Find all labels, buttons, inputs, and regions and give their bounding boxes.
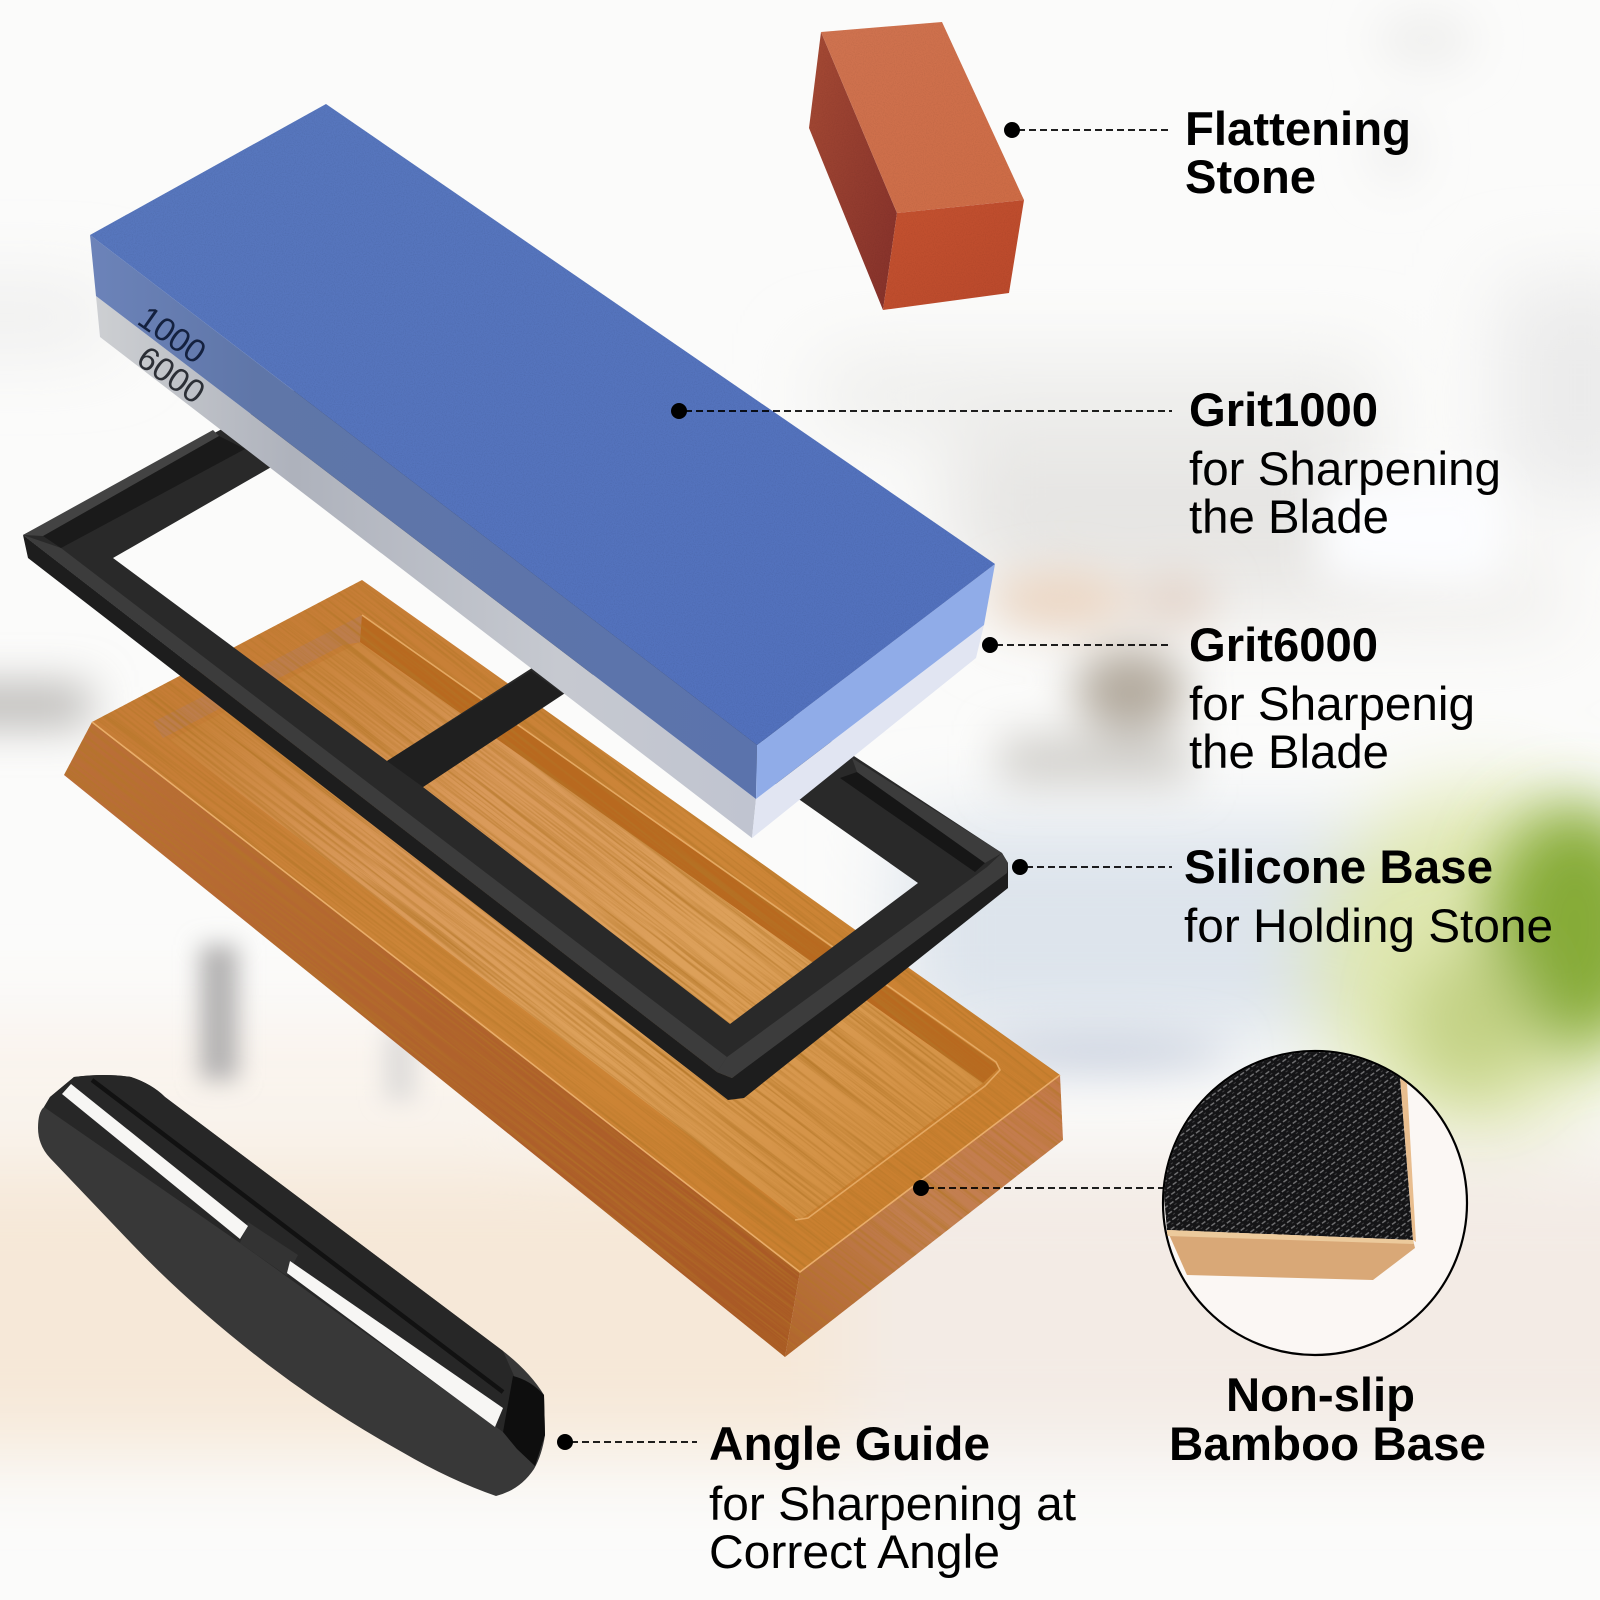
label: angle guide: for Sharpening at <box>709 1477 1076 1530</box>
circle background <box>1163 1051 1467 1355</box>
label: silicone base <box>1184 840 1553 952</box>
label: angle guide <box>709 1417 1076 1578</box>
leader: grit 6000 <box>982 637 1172 653</box>
label: grit 6000 <box>1189 618 1475 778</box>
frame short arm outer strip <box>23 430 219 536</box>
grit 1000 long side <box>90 235 757 799</box>
frame right arm groove <box>840 772 985 872</box>
label: grit 6000: for Sharpenig <box>1189 677 1475 730</box>
wood grain <box>64 581 1063 1357</box>
label: grit 1000 <box>1189 383 1501 543</box>
wood edge front <box>1167 1230 1415 1280</box>
bamboo top rim <box>92 580 1060 1272</box>
label: angle guide: Angle Guide <box>709 1417 990 1470</box>
flattening left face <box>809 32 897 310</box>
recess floor <box>170 642 983 1220</box>
wood edge top line <box>1167 1230 1414 1244</box>
label: non-slip bamboo base <box>1169 1368 1486 1470</box>
ceramic strip left <box>62 1084 248 1239</box>
silicone base frame <box>23 390 1008 1100</box>
frame crossbar <box>387 671 563 787</box>
guide channel <box>92 1080 503 1392</box>
grit 6000 end <box>752 625 984 838</box>
recess short wall <box>153 615 362 738</box>
grit labels on stone: 1000 <box>132 298 213 371</box>
label: grit 6000: the Blade <box>1189 725 1389 778</box>
flattening stone <box>800 20 1030 315</box>
frame short arm groove <box>43 436 245 548</box>
stone top face <box>90 104 995 745</box>
guide end cap <box>503 1376 545 1466</box>
label: grit 6000: Grit6000 <box>1189 618 1378 671</box>
label: angle guide: Correct Angle <box>709 1525 1000 1578</box>
guide upper ramp <box>44 1075 515 1432</box>
flattening texture <box>810 24 1022 307</box>
guide center bridge <box>240 1222 298 1276</box>
grit 6000 long side <box>96 296 756 838</box>
frame near arm band <box>717 853 1008 1078</box>
bamboo left side <box>64 722 800 1357</box>
angle guide <box>38 1075 545 1496</box>
label: grit 1000: the Blade <box>1189 490 1389 543</box>
label: non-slip bamboo base: Non-slip <box>1226 1368 1415 1421</box>
flattening top face <box>821 22 1024 213</box>
leader: flattening stone <box>1004 122 1172 138</box>
frame outer side <box>23 535 1008 1100</box>
flattening front face <box>883 200 1024 310</box>
frame long arm band <box>23 535 727 1072</box>
rubber mesh <box>1164 1052 1413 1240</box>
leader: bamboo base <box>913 1180 1164 1196</box>
label: flattening stone <box>1185 102 1411 203</box>
label: flattening stone: Stone <box>1185 150 1316 203</box>
frame top surface <box>23 390 1008 1078</box>
label: silicone base: Silicone Base <box>1184 840 1493 893</box>
label: non-slip bamboo base: Bamboo Base <box>1169 1417 1486 1470</box>
whetstone <box>80 100 1010 838</box>
stone top texture <box>80 100 1010 760</box>
leader: angle guide <box>557 1434 697 1450</box>
label: flattening stone: Flattening <box>1185 102 1411 155</box>
frame right arm outer strip <box>852 758 1002 863</box>
label: grit 1000: for Sharpening <box>1189 442 1501 495</box>
label: silicone base: for Holding Stone <box>1184 899 1553 952</box>
guide body <box>38 1075 545 1496</box>
label: grit 1000: Grit1000 <box>1189 383 1378 436</box>
recess long wall <box>360 615 1000 1083</box>
inset circle: non-slip underside <box>1150 1040 1467 1355</box>
wood edge side <box>1400 1077 1416 1242</box>
bamboo base <box>64 580 1063 1357</box>
recess and rim highlight lines <box>92 615 1060 1272</box>
ceramic strip right <box>287 1261 503 1427</box>
grit labels on stone: 6000 <box>131 338 212 411</box>
leader: silicone base <box>1012 859 1172 875</box>
leader: grit 1000 <box>671 403 1172 419</box>
grit 1000 end <box>756 564 995 799</box>
bamboo right side <box>785 1075 1063 1357</box>
grit labels on stone <box>131 298 213 411</box>
